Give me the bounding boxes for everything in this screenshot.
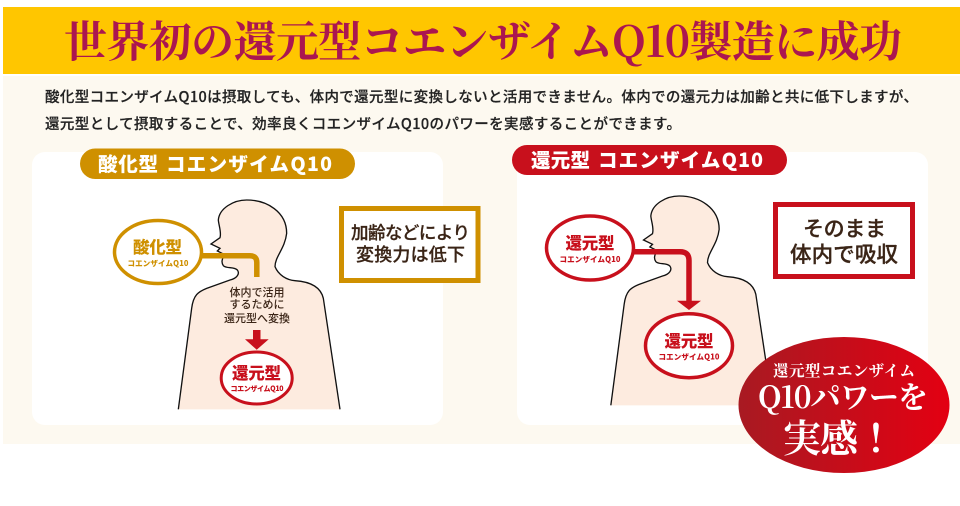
panel heading pill: reduced [512, 144, 787, 175]
arrow: conversion [245, 330, 269, 350]
callout: conversion decline [342, 208, 478, 280]
bubble: reduced Q10 in body [221, 352, 292, 404]
panel heading pill: oxidized: コエンザイムQ10 [166, 148, 332, 177]
intro text: 酸化型コエンザイムQ10は摂取しても、体内で還元型に変換しないと活用できません。体内での還元力は加齢と共に低下しますが、 [45, 86, 918, 107]
arrow: direct absorption [634, 252, 701, 310]
callout: conversion decline: 変換力は低下 [356, 241, 465, 267]
panel heading pill: reduced: コエンザイムQ10 [598, 144, 763, 173]
bubble: reduced Q10 absorbed: 還元型 [664, 328, 714, 352]
body silhouette: oxidized [178, 200, 340, 409]
bubble: reduced Q10 in body: コエンザイムQ10 [230, 384, 284, 394]
bubble: oxidized Q10 [114, 220, 202, 284]
bubble: reduced Q10 intake: 還元型 [566, 230, 614, 254]
background: cream section [3, 76, 960, 444]
panel heading pill: oxidized [80, 148, 355, 179]
bubble: oxidized Q10: コエンザイムQ10 [128, 258, 189, 269]
bubble: oxidized Q10: 酸化型 [133, 234, 182, 258]
intro text [45, 86, 918, 134]
callout: conversion decline: 加齢などにより [351, 220, 470, 245]
panel heading pill: reduced: 還元型 [531, 144, 590, 173]
badge: feel the Q10 power: 実感！ [783, 408, 895, 463]
callout: absorbed as is: そのまま [803, 213, 886, 243]
bubble: reduced Q10 in body: 還元型 [232, 360, 281, 384]
bubble: reduced Q10 absorbed: コエンザイムQ10 [658, 352, 720, 362]
panel: reduced type [512, 144, 928, 425]
callout: absorbed as is [776, 204, 912, 276]
bubble: reduced Q10 intake [546, 216, 634, 280]
body silhouette: reduced [611, 196, 772, 405]
intro text: 還元型として摂取することで、効率良くコエンザイムQ10のパワーを実感することができます。 [45, 113, 681, 134]
panel heading pill: oxidized: 酸化型 [98, 148, 158, 177]
badge: feel the Q10 power [738, 337, 950, 473]
conversion note: するために [230, 296, 284, 312]
callout: absorbed as is: 体内で吸収 [790, 238, 898, 269]
badge: feel the Q10 power: Q10パワーを [758, 373, 928, 417]
bubble: reduced Q10 intake: コエンザイムQ10 [560, 254, 621, 265]
conversion note: 還元型へ変換 [224, 310, 290, 326]
title banner: 世界初の還元型コエンザイムQ10製造に成功 [64, 9, 902, 70]
conversion note: 体内で活用 [230, 284, 284, 300]
conversion note [224, 284, 290, 326]
panel: oxidized type [32, 148, 478, 425]
bubble: reduced Q10 absorbed [646, 314, 732, 378]
badge: feel the Q10 power: 還元型コエンザイム [773, 359, 915, 381]
tube: oxidized intake [202, 256, 257, 277]
